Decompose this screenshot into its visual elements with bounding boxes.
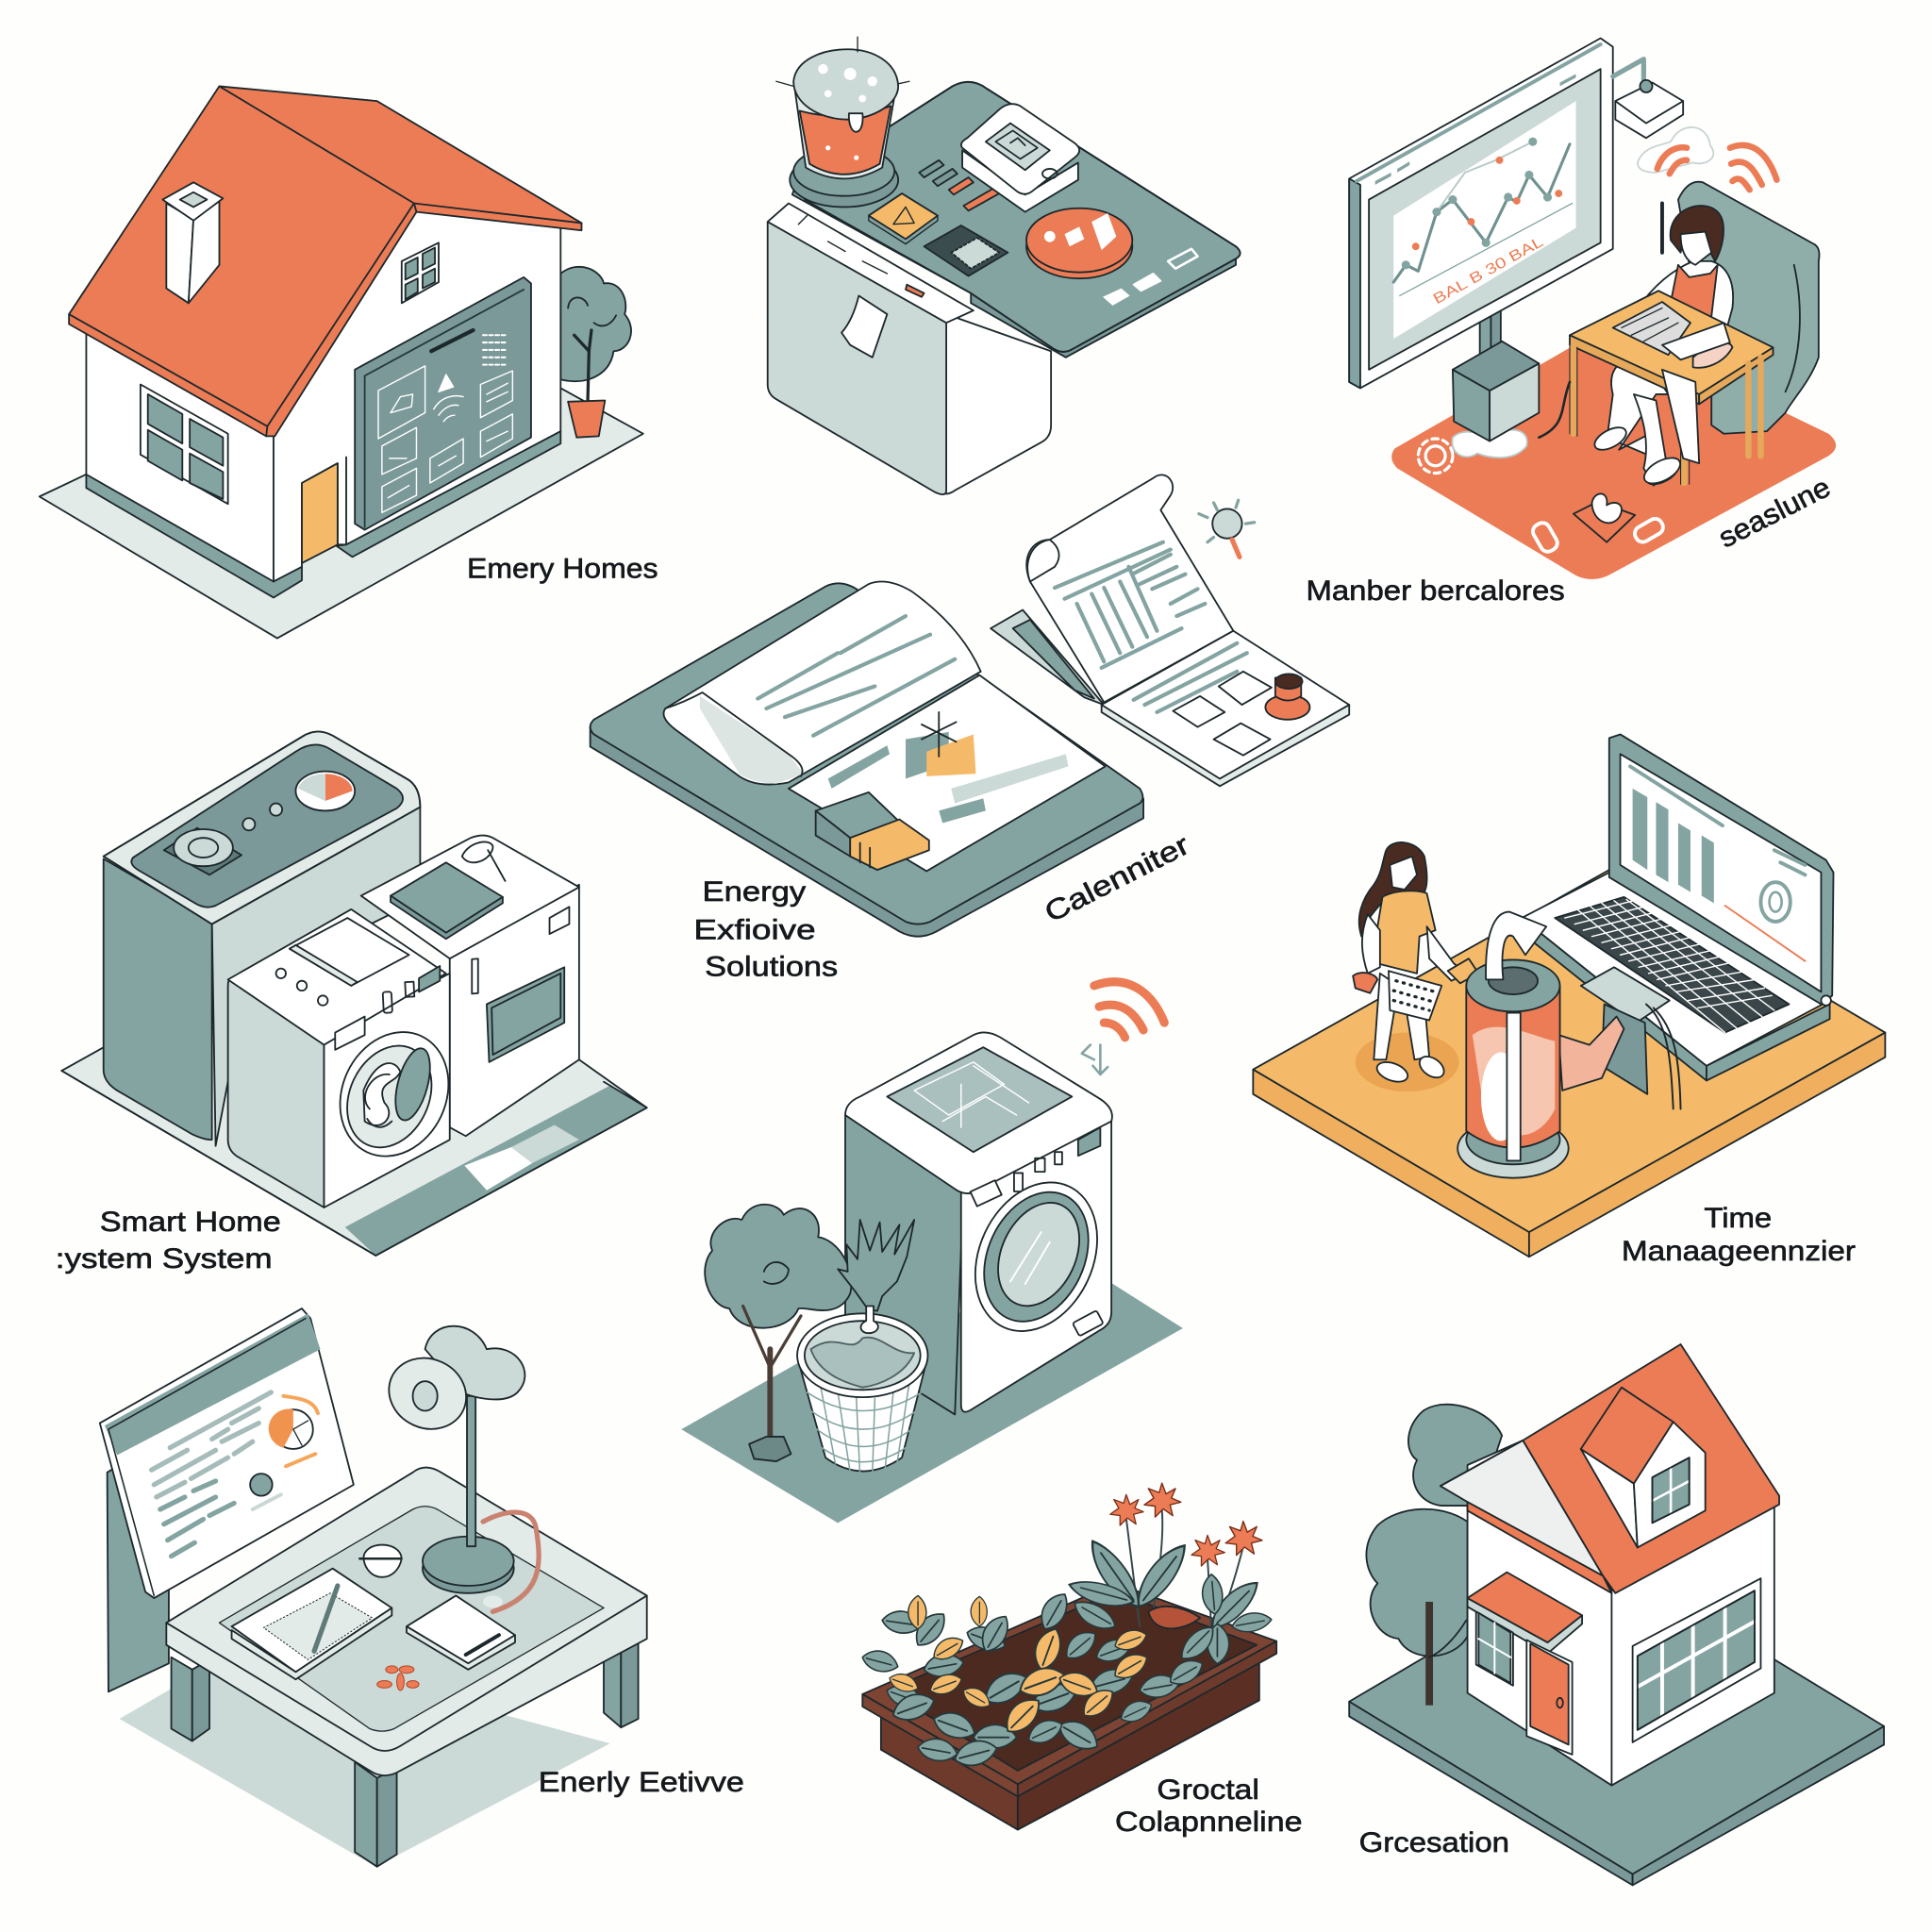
large cabinet	[104, 731, 420, 1146]
amber platform	[1253, 870, 1885, 1257]
large monitor	[1349, 38, 1613, 388]
person leg front	[1641, 370, 1699, 489]
lower panel	[1102, 631, 1349, 786]
magnifier icon	[1199, 500, 1255, 557]
desk	[1570, 291, 1774, 484]
labels: Smart Home	[100, 1207, 281, 1238]
router and bracket	[1613, 59, 1683, 138]
washing machine	[228, 909, 468, 1208]
page with chart	[1026, 475, 1233, 702]
desk legs	[172, 1639, 639, 1867]
spiky plant	[838, 1220, 914, 1311]
cable	[1539, 382, 1570, 438]
orange disc	[1026, 208, 1132, 278]
trees	[1366, 1405, 1502, 1706]
woman	[1353, 842, 1478, 1086]
side window	[1476, 1611, 1513, 1686]
left window	[141, 385, 228, 504]
plant pot	[568, 400, 605, 438]
labels: Energy	[702, 876, 806, 908]
wifi arcs	[1657, 145, 1776, 190]
orange rug	[1391, 326, 1836, 579]
label: rotated: seaslune	[1714, 472, 1836, 554]
tree behind house	[560, 267, 631, 402]
base strips	[86, 474, 302, 597]
red flower heads	[1110, 1483, 1262, 1566]
main roof	[69, 86, 581, 436]
upper window	[402, 242, 439, 303]
amber leaves	[887, 1595, 1151, 1739]
gable	[1441, 1441, 1603, 1576]
label: Grcesation	[1359, 1827, 1509, 1858]
chimney	[162, 182, 223, 303]
orange bloom	[1148, 1607, 1200, 1628]
panel: raised garden planter: Colapnneline	[1115, 1807, 1303, 1838]
notebook	[232, 1569, 391, 1679]
labels: Time	[1704, 1203, 1772, 1234]
panel: desk with monitor and lamp	[100, 1308, 744, 1867]
monitor	[100, 1308, 354, 1598]
counter box	[768, 204, 1051, 494]
slate plate	[591, 727, 1143, 937]
panel: foldable report document	[991, 475, 1349, 786]
gear	[1418, 439, 1453, 474]
sticky note	[841, 295, 887, 358]
small box	[816, 792, 929, 870]
panel: report tablet with curled paper	[591, 581, 1194, 982]
small tree mark	[922, 712, 957, 757]
panel: raised garden planter	[860, 1483, 1303, 1838]
teal ground	[681, 1281, 1183, 1523]
oven	[361, 836, 579, 1136]
awning	[1468, 1573, 1582, 1658]
cylinder blender	[1457, 912, 1569, 1178]
white tabs	[1103, 249, 1198, 306]
panel: report tablet with curled paper: Solutions	[705, 951, 838, 982]
labels: Groctal	[1157, 1774, 1259, 1806]
tree	[705, 1205, 852, 1461]
monitor stand	[1453, 308, 1539, 441]
chair	[1678, 182, 1819, 434]
panel: report tablet with curled paper: Calenniter	[1040, 829, 1194, 929]
blender	[776, 37, 909, 207]
panel: blender and control counter	[768, 37, 1241, 494]
orange door	[1526, 1640, 1573, 1755]
chart caption: BAL B 30 BAL	[1431, 234, 1546, 308]
right wall	[274, 209, 560, 581]
cup	[359, 1545, 402, 1577]
basket	[797, 1306, 928, 1476]
desk top	[166, 1468, 647, 1775]
rug items	[1530, 493, 1666, 555]
floor shadow	[120, 1645, 610, 1867]
flower on desk	[377, 1666, 419, 1690]
panel: house with smart wall panel	[40, 86, 658, 639]
ground with strip	[61, 1023, 647, 1256]
panel: laptop and woman on amber platform	[1253, 734, 1885, 1267]
wifi signal	[1094, 982, 1164, 1038]
panel: smart home appliances: :ystem System	[56, 1243, 273, 1274]
label: Enerly Eetivve	[539, 1767, 744, 1798]
label: Emery Homes	[467, 554, 658, 585]
back slate	[991, 610, 1104, 705]
amber door	[302, 463, 338, 563]
back panel	[108, 1436, 169, 1691]
ground slab	[40, 388, 643, 639]
smart wall panel	[355, 277, 531, 530]
teal device with handle	[1558, 1004, 1681, 1109]
laptop	[1522, 734, 1834, 1080]
flower stems	[1126, 1509, 1243, 1626]
panel: monitor and analyst workstation	[1306, 38, 1836, 607]
planter box	[862, 1583, 1276, 1830]
cloud	[1638, 127, 1713, 173]
panel: cottage with dormer	[1349, 1344, 1884, 1885]
down arrow mark	[1082, 1045, 1108, 1074]
panel: report tablet with curled paper: Exfioive	[693, 914, 816, 945]
top control plate	[792, 82, 1241, 358]
desk scene	[100, 1308, 647, 1867]
left wall	[86, 326, 274, 581]
panel: laptop and woman on amber platform: Manaageennzier	[1622, 1236, 1856, 1267]
text lines	[758, 616, 955, 736]
curled page	[663, 581, 981, 785]
teal base slab	[1349, 1554, 1884, 1885]
walls	[1468, 1441, 1774, 1786]
lower page	[789, 675, 1106, 871]
small status bars	[919, 160, 999, 210]
dark qr tile	[924, 225, 1008, 276]
label: members: Manber bercalores	[1306, 575, 1565, 607]
chart marks	[828, 732, 1068, 823]
front large window	[1633, 1578, 1760, 1742]
amber tile	[869, 193, 938, 244]
lamp	[377, 1326, 539, 1611]
workstation scene	[1349, 38, 1836, 579]
person seated	[1591, 204, 1733, 489]
dormer	[1581, 1388, 1706, 1547]
washer	[845, 1032, 1121, 1414]
smart box	[961, 104, 1079, 212]
teal leaves	[860, 1535, 1273, 1770]
tablet	[407, 1595, 515, 1670]
panel: washer with tree and basket	[681, 982, 1183, 1523]
panel: smart home appliances	[56, 731, 647, 1274]
smoke clouds	[1452, 430, 1527, 458]
main roof	[1441, 1344, 1779, 1593]
